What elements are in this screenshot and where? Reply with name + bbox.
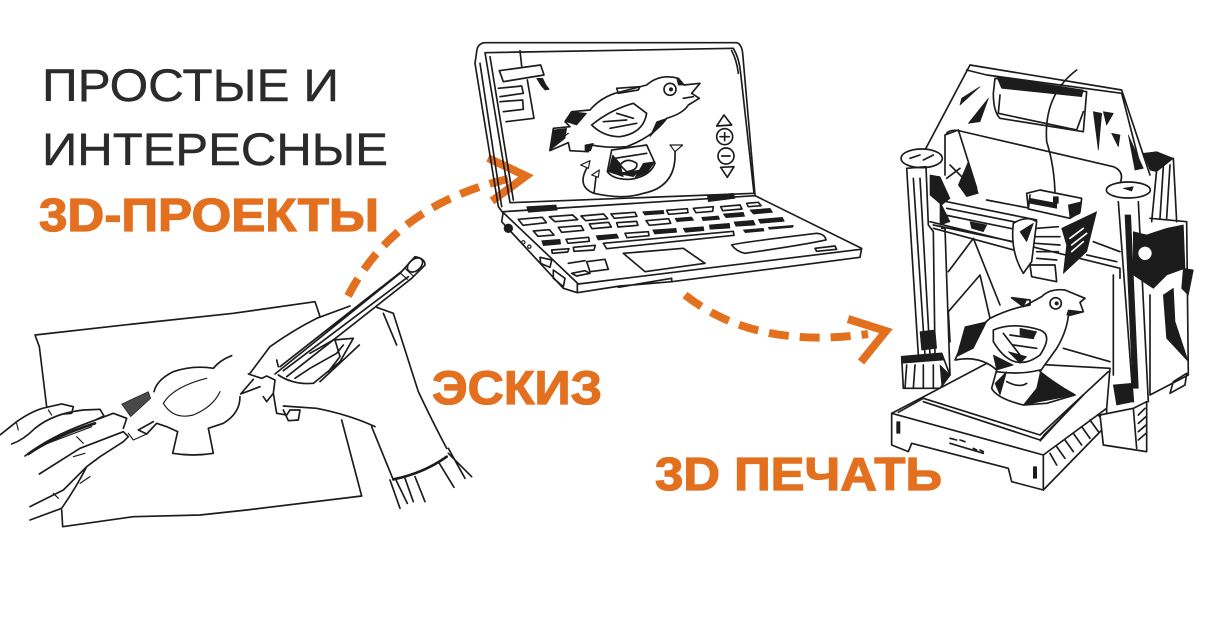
- laptop base: [502, 193, 862, 293]
- bird on screen: [549, 77, 700, 152]
- right hand and glove: [248, 306, 472, 508]
- paper sheet: [35, 302, 362, 527]
- bird sketch on paper: [122, 356, 240, 455]
- keyboard: [518, 202, 793, 276]
- left hand: [0, 404, 128, 520]
- illustration: hands sketching on paper: [0, 255, 472, 527]
- label: 3D print: 3D ПЕЧАТЬ: [655, 448, 942, 500]
- title: ИНТЕРЕСНЫЕ: [42, 124, 388, 175]
- rotation arrows: [581, 145, 683, 197]
- bird pedestal on screen: [607, 145, 655, 179]
- z columns: [901, 149, 1150, 405]
- right side panel: [1133, 152, 1193, 395]
- stepper motor: [1100, 402, 1147, 452]
- pencil: [241, 255, 425, 394]
- arrow: sketch to laptop: [348, 158, 526, 296]
- left back panel: [948, 238, 1000, 342]
- bird on print bed: [955, 290, 1085, 405]
- arrow: laptop to printer: [685, 295, 886, 362]
- filament: [1046, 70, 1077, 197]
- illustration: laptop with bird model: [475, 43, 862, 293]
- title: 3D-ПРОЕКТЫ: [39, 189, 379, 241]
- zoom controls: [717, 115, 734, 177]
- title: ПРОСТЫЕ И: [42, 60, 339, 111]
- top frame: [925, 65, 1150, 183]
- title: [39, 60, 388, 241]
- print bed: [892, 362, 1110, 490]
- screen sidebar: [498, 51, 549, 122]
- laptop lid: [475, 43, 755, 213]
- extruder carriage: [1013, 190, 1097, 282]
- x gantry rails: [930, 130, 1120, 278]
- label: sketch: ЭСКИЗ: [432, 361, 602, 414]
- touchpad and palm rest: [623, 233, 837, 272]
- illustration: 3D printer printing the bird: [892, 65, 1193, 490]
